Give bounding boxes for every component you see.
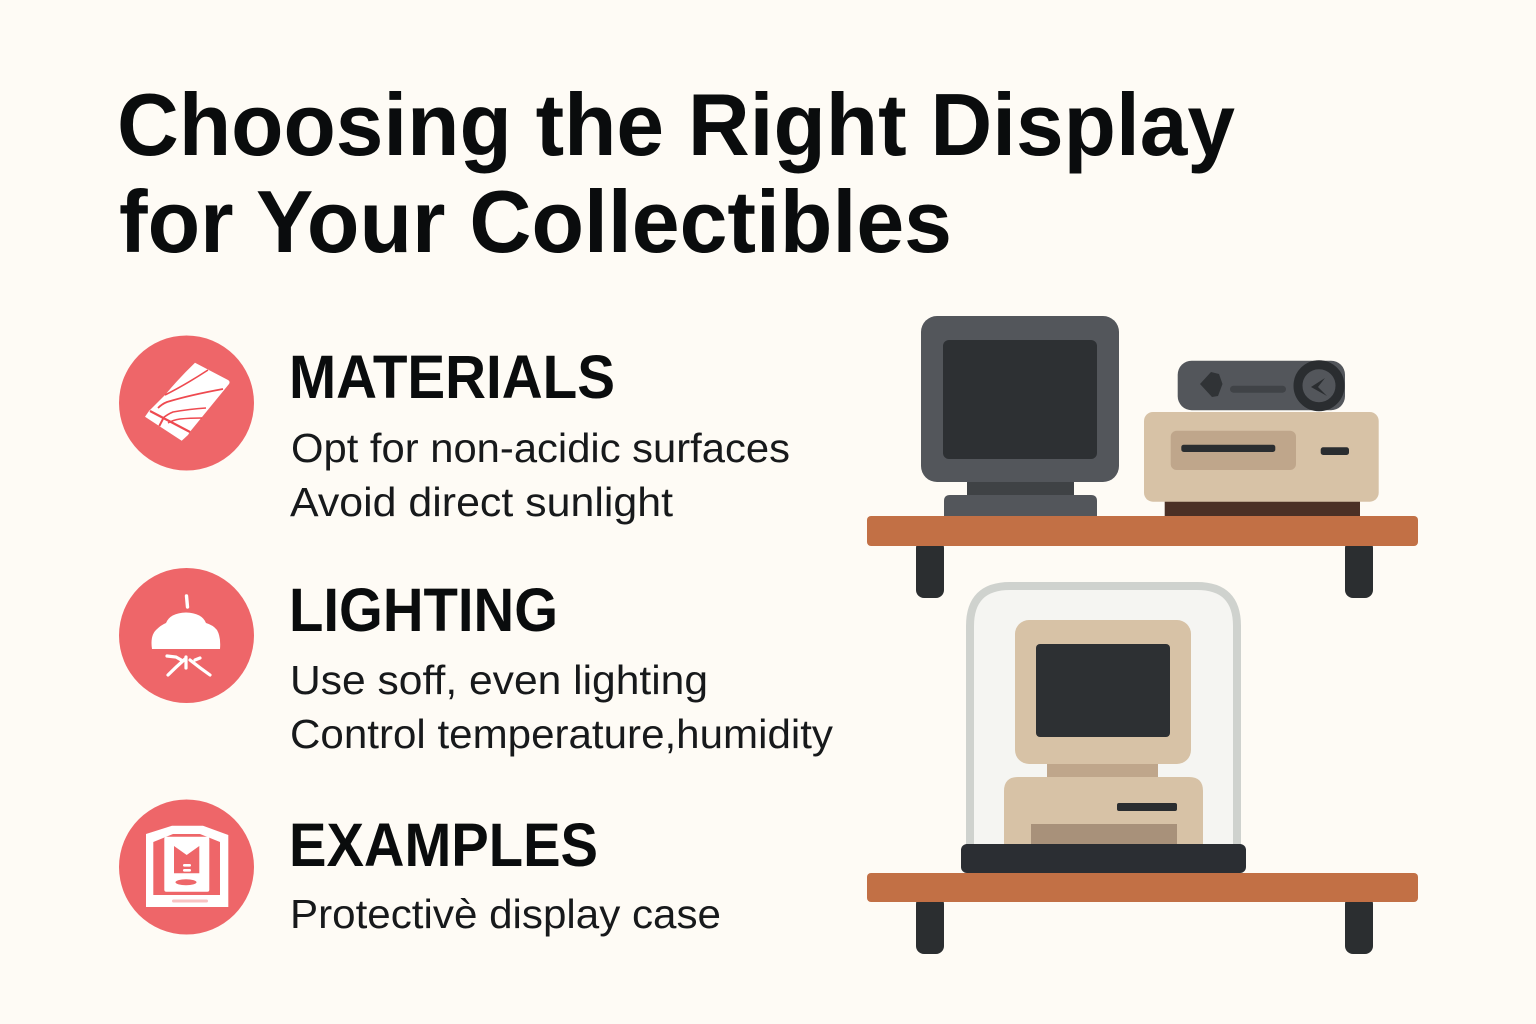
text: lighting details: Control temperature,humidity — [290, 711, 834, 757]
icon: ceiling lamp — [119, 568, 254, 703]
title: Choosing the Right Display — [117, 75, 1235, 174]
panel: lighting — [119, 568, 834, 757]
shelf board — [867, 873, 1418, 954]
text: materials details: Opt for non-acidic surfaces — [291, 425, 790, 471]
panel: examples — [119, 800, 721, 937]
text: materials details — [290, 425, 790, 525]
text: materials details: Avoid direct sunlight — [290, 479, 674, 525]
case base — [961, 844, 1246, 873]
icon: monitor — [921, 316, 1119, 516]
title: for Your Collectibles — [119, 172, 952, 271]
icon: beige console — [1144, 412, 1379, 516]
text: lighting details: Use soff, even lighting — [290, 657, 708, 703]
title — [117, 75, 1235, 271]
illustration: lower shelf with display case — [867, 586, 1418, 954]
icon: materials swatch — [119, 336, 254, 470]
icon: glass case — [970, 586, 1237, 850]
icon: display case — [119, 800, 254, 934]
heading: lighting: LIGHTING — [289, 576, 558, 644]
text: lighting details — [290, 657, 834, 757]
heading: materials: MATERIALS — [289, 343, 615, 411]
shelf board — [867, 516, 1418, 598]
illustration: upper shelf — [867, 316, 1418, 598]
icon: projector — [1178, 361, 1345, 410]
icon: retro computer — [1004, 620, 1203, 846]
heading: examples: EXAMPLES — [289, 811, 598, 879]
text: examples details: Protectivè display case — [290, 891, 721, 937]
panel: materials — [119, 336, 790, 525]
